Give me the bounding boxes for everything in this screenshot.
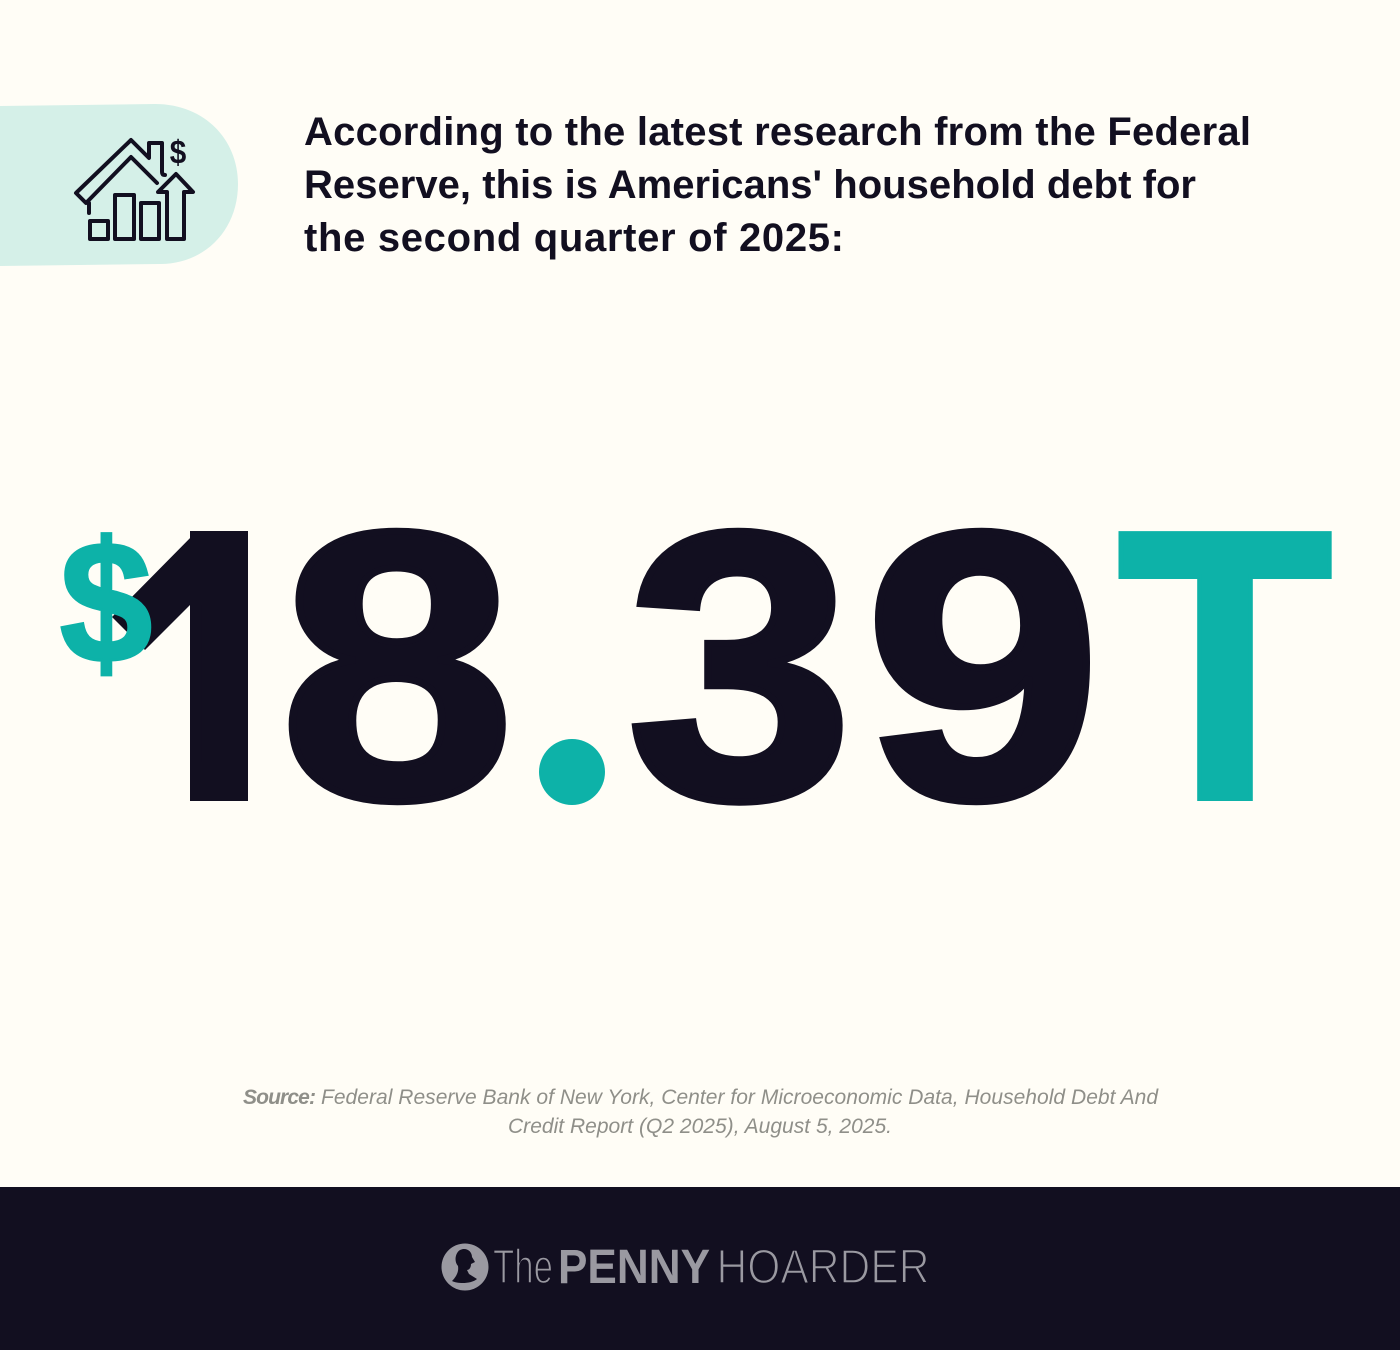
source note: Source: [243,1086,316,1109]
heading: the second quarter of 2025: [304,216,844,260]
icon: dollar sign: $ [170,134,186,171]
big number: $18.39T [60,528,1332,806]
heading: According to the latest research from the Federal [304,110,1251,154]
logo wordmark: PENNY [558,1241,710,1294]
source note: Credit Report (Q2 2025), August 5, 2025. [508,1115,892,1138]
logo wordmark [493,1241,930,1294]
letter T: T [1117,451,1333,881]
icon: house and arrow [76,140,193,239]
source note: Federal Reserve Bank of New York, Center for Microeconomic Data, Household Debt And [321,1086,1159,1109]
footer band [0,1187,1400,1350]
heading: Reserve, this is Americans' household debt for [304,163,1196,207]
digit 3: 3 [626,452,854,879]
digit 1: 1 [113,455,325,882]
decimal point: . [554,683,590,829]
logo wordmark: The [493,1241,553,1294]
heading [304,110,1251,260]
dollar sign: $ [60,505,152,699]
decimal point [539,683,605,829]
badge background [0,104,238,266]
digit 9: 9 [864,452,1102,879]
logo wordmark: HOARDER [716,1241,930,1294]
icon badge: house with rising bars [0,104,238,266]
digit 1 [112,531,248,801]
logo medallion [442,1244,488,1290]
footer logo [442,1241,930,1294]
digits 8: 8 [279,452,515,879]
source note [243,1086,1159,1138]
